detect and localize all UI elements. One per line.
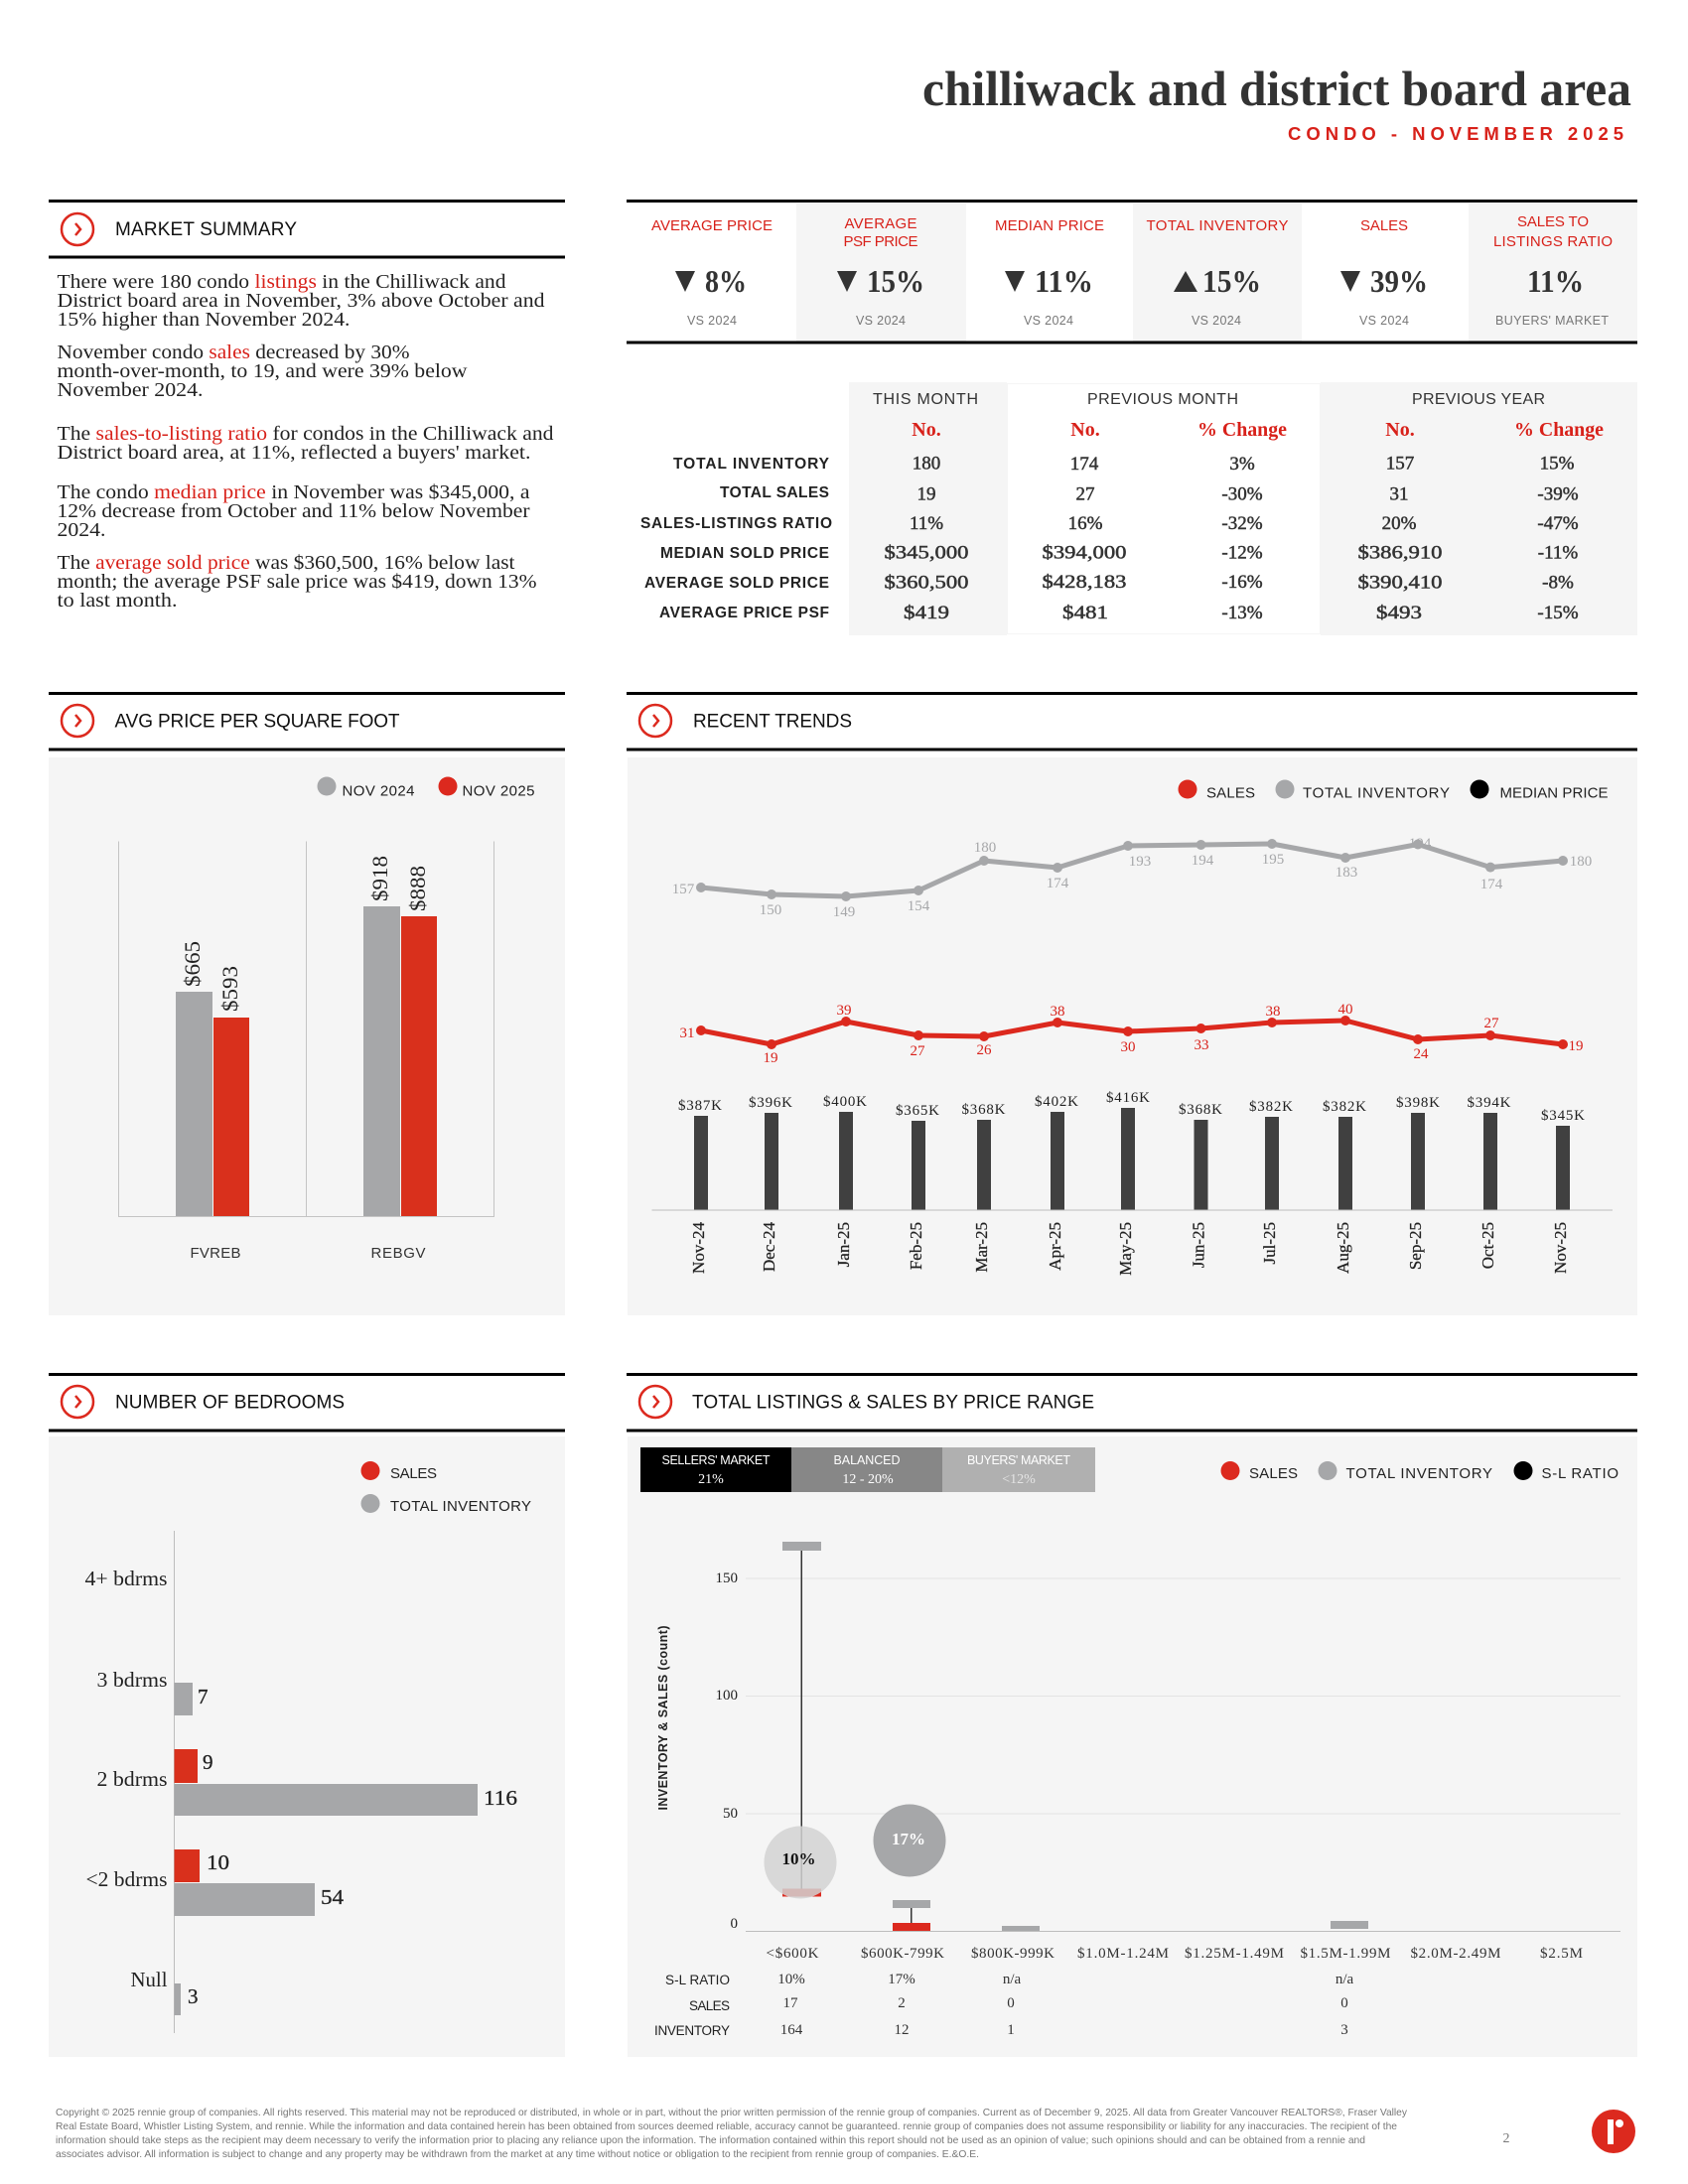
icon: chevron circle [639, 1386, 671, 1418]
text block: sales: November condo sales decreased by 30% [58, 341, 409, 363]
month axis labels: Apr-25 [1046, 1222, 1064, 1271]
y axis and grid: INVENTORY & SALES (count) [656, 1626, 670, 1811]
metric: median price [995, 217, 1104, 328]
data rows: n/a [1003, 1972, 1022, 1987]
month axis labels: Jun-25 [1190, 1222, 1207, 1268]
data rows: 164 [780, 2022, 803, 2038]
month axis labels: Nov-24 [689, 1222, 708, 1274]
row: average price psf: -13% [1221, 603, 1263, 623]
metric: sales to listings ratio: LISTINGS RATIO [1493, 233, 1613, 250]
line chart: total inventory: 154 [908, 898, 930, 914]
row: average price psf: AVERAGE PRICE PSF [659, 605, 829, 621]
table headers: No. [1070, 419, 1100, 441]
metric: sales to listings ratio: SALES TO [1517, 213, 1589, 230]
legend: TOTAL INVENTORY [1303, 784, 1450, 802]
bar chart: median price [651, 1090, 1613, 1211]
month axis labels [689, 1222, 1570, 1276]
panel: number of bedrooms [49, 1373, 565, 2057]
line chart: total inventory: 193 [1129, 854, 1151, 870]
text block: sales [58, 341, 468, 401]
metric: median price: VS 2024 [1024, 314, 1073, 328]
table headers: No. [912, 419, 941, 441]
y axis and grid: 150 [715, 1570, 738, 1586]
bar chart: bedrooms: Null [131, 1968, 168, 1991]
legend [361, 1461, 531, 1515]
data rows: 17 [782, 1995, 798, 2011]
row: average sold price: $428,183 [1043, 572, 1126, 593]
month axis labels: Feb-25 [907, 1222, 925, 1270]
legend [1221, 1461, 1618, 1482]
line chart: total inventory: 157 [672, 882, 695, 897]
text block: listings: 15% higher than November 2024. [58, 309, 350, 331]
heading: total listings and sales by price range: TOTAL LISTINGS & SALES BY PRICE RANGE [692, 1392, 1094, 1414]
footer disclaimer: Copyright © 2025 rennie group of companies. All rights reserved. This material may not be reproduced or distributed, in whole or in part, without the prior written permission of the rennie group of companies. Current as of December 9, 2025. All data from Greater Vancouver REALTORS®, Fraser Valley [56, 2107, 1408, 2118]
row: average price psf: $419 [904, 603, 949, 623]
data rows: S-L RATIO [665, 1973, 730, 1987]
row: average price psf: $493 [1376, 603, 1422, 623]
price range labels: $800K-999K [971, 1946, 1055, 1962]
metric: sales to listings ratio: BUYERS' MARKET [1495, 314, 1609, 328]
bar chart: bedrooms: 116 [484, 1786, 517, 1810]
price range labels: $2.5M [1540, 1946, 1583, 1962]
market key: BUYERS' MARKET [967, 1453, 1070, 1467]
bar chart: rebgv: REBGV [371, 1245, 425, 1262]
text block: sales: month-over-month, to 19, and were 39% below [58, 360, 468, 382]
row: total inventory: 157 [1386, 453, 1414, 475]
bar chart: median price: $398K [1396, 1095, 1440, 1111]
line chart: sales [679, 1002, 1583, 1066]
market key: SELLERS' MARKET [661, 1453, 771, 1467]
metric: sales: VS 2024 [1359, 314, 1409, 328]
icon: rennie logo [1592, 2110, 1635, 2153]
metric: total inventory: TOTAL INVENTORY [1146, 217, 1289, 234]
panel: data table [640, 382, 1637, 635]
metric: total inventory: 15% [1202, 263, 1261, 299]
row: total sales [720, 484, 1579, 504]
line chart: sales: 33 [1194, 1037, 1209, 1053]
row: total inventory [673, 453, 1575, 475]
bar chart: median price: $382K [1249, 1099, 1293, 1115]
row: median sold price: -12% [1221, 542, 1263, 564]
row: median sold price: -11% [1538, 542, 1578, 564]
metric: total inventory: VS 2024 [1192, 314, 1241, 328]
row: total sales: 19 [917, 484, 935, 504]
data rows: 12 [894, 2022, 910, 2038]
text block: average sold price [58, 552, 536, 612]
table headers: PREVIOUS MONTH [1087, 391, 1238, 408]
bar chart: bedrooms: 54 [321, 1885, 345, 1909]
price range labels: $1.5M-1.99M [1301, 1946, 1390, 1962]
row: average sold price: $390,410 [1358, 572, 1442, 594]
row: total inventory: 3% [1229, 454, 1255, 475]
row: average sold price: AVERAGE SOLD PRICE [644, 575, 829, 592]
line chart: sales: 31 [679, 1025, 695, 1041]
text block: sales: November 2024. [58, 379, 203, 401]
row: median sold price: MEDIAN SOLD PRICE [660, 545, 829, 562]
data rows: SALES [689, 1998, 730, 2013]
table headers: THIS MONTH [873, 391, 978, 408]
bar chart: median price: $416K [1106, 1090, 1150, 1106]
legend [318, 776, 534, 800]
data rows: 17% [888, 1972, 915, 1987]
y axis and grid [656, 1570, 1620, 1932]
metric: average psf price: VS 2024 [856, 314, 906, 328]
footer disclaimer: Real Estate Board, Whistler Listing System, and rennie. While the information and data contained herein has been obtained from sources deemed reliable, accuracy cannot be guaranteed. rennie group of companies does not assume responsibility or liability for any inaccuracies. The recipient of the [56, 2120, 1397, 2132]
data rows [654, 1972, 1354, 2038]
table headers: No. [1385, 419, 1415, 441]
price range labels: $1.25M-1.49M [1185, 1946, 1284, 1962]
row: sales-listings ratio: 11% [910, 513, 943, 534]
line chart: total inventory: 195 [1262, 852, 1284, 868]
line chart: total inventory: 149 [833, 904, 855, 920]
bar chart: median price: $396K [749, 1095, 792, 1111]
bar chart: bedrooms: 3 [188, 1984, 199, 2008]
chart axes [119, 842, 494, 1217]
table headers: PREVIOUS YEAR [1412, 391, 1545, 408]
row: average price psf [659, 603, 1579, 623]
line chart: sales: 24 [1414, 1046, 1429, 1062]
data rows: 0 [1007, 1995, 1015, 2011]
table headers [873, 391, 1604, 441]
metric: average price: 8% [705, 263, 747, 299]
metric: average psf price [837, 215, 924, 328]
bar chart: fvreb [176, 941, 249, 1262]
line chart: sales: 19 [763, 1050, 778, 1066]
month axis labels: Jan-25 [834, 1222, 853, 1267]
range bars: 600K to 799K [893, 1900, 930, 1931]
line chart: sales: 19 [1569, 1038, 1583, 1054]
row: sales-listings ratio: 16% [1068, 513, 1103, 534]
price range labels: $2.0M-2.49M [1410, 1946, 1501, 1962]
metric: sales to listings ratio [1493, 213, 1613, 328]
row: sales-listings ratio: SALES-LISTINGS RATIO [640, 515, 832, 532]
legend: MEDIAN PRICE [1499, 784, 1609, 802]
bar chart: bedrooms: 10 [207, 1850, 229, 1874]
metric: average psf price: 15% [867, 263, 924, 299]
icon: chevron circle [62, 213, 93, 245]
metric: sales [1340, 217, 1428, 328]
footer disclaimer: information should take steps as the recipient may deem necessary to verify the information prior to placing any reliance upon the information. The information contained within this report should not be used as an opinion of value; such opinions should and can be obtained from a rennie and [56, 2134, 1365, 2146]
row: average sold price: -8% [1542, 572, 1574, 594]
metric: sales to listings ratio: 11% [1527, 263, 1584, 299]
price range labels: <$600K [767, 1946, 819, 1962]
line chart: sales: 26 [977, 1042, 992, 1058]
month axis labels: Jul-25 [1260, 1222, 1279, 1265]
bar chart: bedrooms: 2 bdrms [97, 1767, 167, 1791]
legend: SALES [390, 1465, 437, 1482]
legend: S-L RATIO [1541, 1465, 1618, 1482]
bubble: 17 percent: 17% [892, 1830, 925, 1848]
line chart: sales: 38 [1265, 1004, 1281, 1020]
bar chart: rebgv: $918 [367, 856, 392, 901]
line chart: total inventory: 174 [1047, 876, 1069, 891]
bar chart: median price: $402K [1035, 1094, 1078, 1110]
y axis and grid: 0 [731, 1916, 738, 1932]
title: chilliwack and district board area [922, 61, 1631, 116]
panel: key metrics strip [627, 200, 1637, 343]
line chart: sales: 38 [1051, 1004, 1064, 1020]
month axis labels: Oct-25 [1478, 1222, 1497, 1269]
row: average sold price [644, 572, 1574, 594]
footer disclaimer [56, 2107, 1408, 2160]
text block: median price: 12% decrease from October and 11% below November [58, 500, 530, 522]
row: average price psf: -15% [1537, 603, 1579, 623]
text block: sales-to-listing ratio: District board area, at 11%, reflected a buyers' market. [58, 442, 530, 464]
text block: median price: The condo median price in November was $345,000, a [58, 481, 530, 503]
line chart: total inventory: 194 [1409, 836, 1432, 852]
legend [1178, 780, 1609, 802]
bar chart: rebgv: $888 [405, 866, 430, 911]
table headers: % Change [1514, 419, 1604, 441]
bubble: 17 percent [874, 1805, 945, 1876]
line chart: sales: 27 [910, 1043, 925, 1059]
row: total sales: -39% [1537, 484, 1579, 504]
legend: TOTAL INVENTORY [390, 1498, 531, 1515]
line chart: total inventory: 150 [760, 902, 781, 918]
data rows: n/a [1336, 1972, 1354, 1987]
line chart: sales: 27 [1483, 1016, 1499, 1031]
icon: chevron circle [62, 1386, 93, 1418]
market key: 12 - 20% [842, 1472, 894, 1487]
data rows: 2 [898, 1995, 906, 2011]
row: sales-listings ratio [640, 513, 1579, 534]
range bars: under 600K [782, 1542, 821, 1896]
row: median sold price [660, 542, 1578, 564]
metric: median price: MEDIAN PRICE [995, 217, 1104, 234]
row: total inventory: 180 [913, 453, 940, 475]
heading: market summary: MARKET SUMMARY [115, 219, 297, 240]
metric: total inventory [1146, 217, 1289, 328]
bar chart: bedrooms: 3 bdrms [97, 1668, 167, 1692]
icon: chevron circle [639, 705, 671, 737]
data rows: 3 [1340, 2022, 1348, 2038]
metric: average psf price: AVERAGE [844, 215, 917, 232]
subtitle: CONDO - NOVEMBER 2025 [1288, 123, 1623, 144]
table headers: % Change [1197, 419, 1287, 441]
bar chart: median price: $387K [678, 1098, 722, 1114]
text block: average sold price: The average sold price was $360,500, 16% below last [58, 552, 515, 574]
text block: average sold price: to last month. [58, 590, 177, 612]
row: sales-listings ratio: 20% [1382, 513, 1417, 534]
bar chart: median price: $365K [896, 1103, 939, 1119]
row: total sales: 27 [1076, 484, 1094, 504]
bar chart: median price: $394K [1468, 1095, 1511, 1111]
row: median sold price: $386,910 [1358, 542, 1442, 564]
row: total inventory: TOTAL INVENTORY [673, 456, 830, 473]
bar chart: bedrooms: <2 bdrms [85, 1867, 167, 1891]
line chart: total inventory: 194 [1192, 853, 1214, 869]
range bar: 1.5M to 1.99M [1331, 1921, 1368, 1929]
row: sales-listings ratio: -47% [1537, 513, 1579, 534]
market key [640, 1447, 1095, 1492]
y axis and grid: 50 [723, 1806, 738, 1822]
data rows: 10% [777, 1972, 805, 1987]
price range labels: $600K-799K [861, 1946, 944, 1962]
month axis labels: Sep-25 [1406, 1222, 1425, 1270]
line chart: sales: 39 [836, 1003, 852, 1019]
row: median sold price: $345,000 [884, 542, 969, 564]
legend: NOV 2024 [342, 782, 415, 800]
row: total sales: TOTAL SALES [720, 484, 829, 501]
heading: recent trends: RECENT TRENDS [693, 711, 852, 733]
bar chart: rebgv [363, 856, 437, 1262]
row: average sold price: -16% [1221, 572, 1263, 593]
row: median sold price: $394,000 [1043, 542, 1126, 564]
market key: <12% [1002, 1472, 1036, 1487]
heading: number of bedrooms: NUMBER OF BEDROOMS [115, 1392, 345, 1414]
range bar: 800K to 999K [1002, 1926, 1040, 1931]
y axis and grid: 100 [715, 1688, 738, 1704]
month axis labels: Mar-25 [972, 1222, 991, 1273]
text block: sales-to-listing ratio [58, 423, 554, 464]
legend: NOV 2025 [463, 782, 534, 800]
price range labels: $1.0M-1.24M [1077, 1946, 1169, 1962]
metric: average price: VS 2024 [687, 314, 737, 328]
market key: BALANCED [834, 1453, 900, 1467]
panel: recent trends [627, 692, 1637, 1315]
line chart: total inventory: 180 [974, 840, 996, 856]
panel: total listings and sales by price range [627, 1373, 1637, 2057]
metric: average price [651, 217, 773, 328]
bar chart: median price: $345K [1541, 1108, 1585, 1124]
line chart: total inventory [672, 836, 1592, 920]
month axis labels: May-25 [1116, 1222, 1135, 1276]
row: average sold price: $360,500 [884, 572, 969, 594]
legend: TOTAL INVENTORY [1346, 1465, 1492, 1482]
month axis labels: Dec-24 [760, 1222, 778, 1272]
month axis labels: Nov-25 [1551, 1222, 1570, 1274]
line chart: total inventory: 183 [1336, 865, 1357, 881]
market key: 21% [698, 1472, 724, 1487]
page number: 2 [1503, 2131, 1509, 2146]
metric: median price: 11% [1035, 263, 1093, 299]
legend: SALES [1249, 1465, 1298, 1482]
text block: listings: There were 180 condo listings in the Chilliwack and [58, 271, 506, 293]
data rows: INVENTORY [654, 2023, 730, 2038]
metric: average price: AVERAGE PRICE [651, 217, 773, 234]
data rows: 0 [1340, 1995, 1348, 2011]
panel: market summary [49, 200, 565, 612]
panel: avg price per square foot [49, 692, 565, 1315]
row: total sales: 31 [1390, 484, 1408, 504]
bubble: 10 percent [765, 1827, 836, 1898]
bar chart: median price: $382K [1323, 1099, 1366, 1115]
bar chart: median price: $368K [961, 1102, 1006, 1118]
line chart: total inventory: 180 [1570, 854, 1592, 870]
text block: sales-to-listing ratio: The sales-to-listing ratio for condos in the Chilliwack and [58, 423, 554, 445]
footer disclaimer: associates advisor. All information is subject to change and any property may be withdrawn from the market at any time without notice or obligation to the recipient from rennie group of companies. E.&O.E. [56, 2148, 979, 2160]
metric: sales: SALES [1360, 217, 1408, 234]
bar chart: median price: $368K [1179, 1102, 1222, 1118]
icon: chevron circle [62, 705, 93, 737]
text block: median price: 2024. [58, 519, 105, 541]
row: average price psf: $481 [1062, 603, 1108, 623]
bar chart: median price: $400K [823, 1094, 867, 1110]
bar chart: bedrooms: 7 [198, 1685, 209, 1708]
month axis labels: Aug-25 [1334, 1222, 1352, 1274]
row: sales-listings ratio: -32% [1221, 513, 1263, 534]
bar chart: fvreb: $593 [217, 966, 242, 1012]
data rows: 1 [1007, 2022, 1015, 2038]
bar chart: fvreb: $665 [180, 941, 205, 987]
bubble: 10 percent: 10% [782, 1849, 816, 1868]
price range labels [767, 1946, 1583, 1962]
line chart: total inventory: 174 [1480, 877, 1503, 892]
bar chart: fvreb: FVREB [191, 1245, 240, 1262]
text block: median price [58, 481, 530, 541]
legend: SALES [1206, 784, 1255, 802]
bar chart: bedrooms [85, 1531, 517, 2033]
metric: average psf price: PSF PRICE [844, 233, 917, 250]
line chart: sales: 40 [1338, 1002, 1352, 1018]
row: total sales: -30% [1221, 484, 1263, 504]
bar chart: bedrooms: 9 [203, 1750, 212, 1774]
heading: avg price per square foot: AVG PRICE PER SQUARE FOOT [115, 711, 400, 733]
line chart: sales: 30 [1120, 1039, 1136, 1055]
text block: listings: District board area in November, 3% above October and [58, 290, 544, 312]
text block: listings [58, 271, 544, 331]
bar chart: bedrooms: 4+ bdrms [85, 1567, 167, 1590]
row: total inventory: 15% [1540, 453, 1575, 475]
row: total inventory: 174 [1070, 454, 1099, 475]
metric: sales: 39% [1370, 263, 1428, 299]
text block: average sold price: month; the average PSF sale price was $419, down 13% [58, 571, 536, 593]
